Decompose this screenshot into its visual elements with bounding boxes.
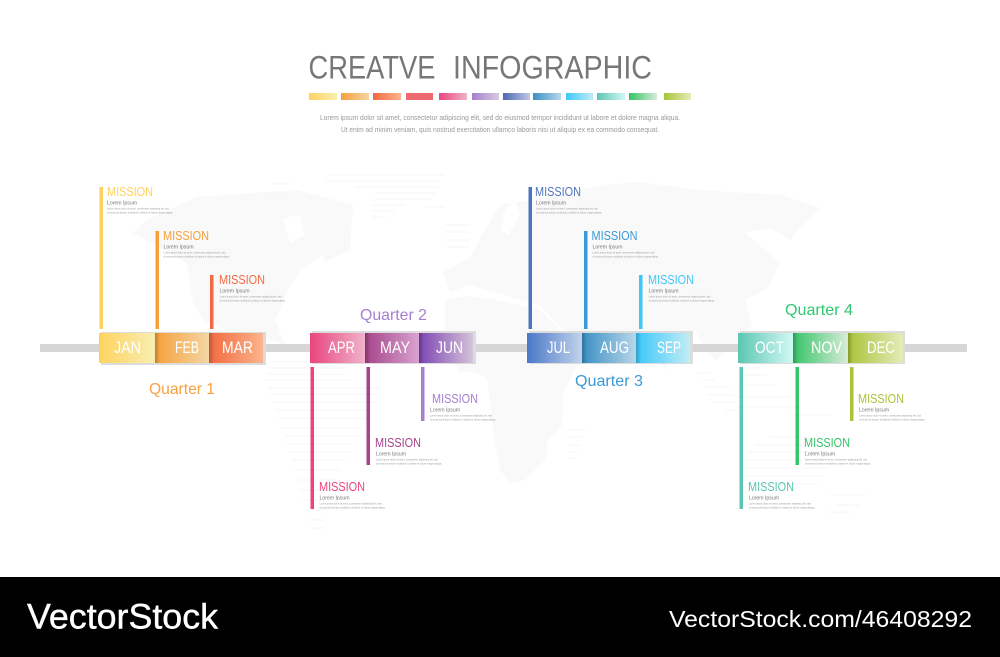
month blocks: apr may jun: APR [328,339,355,357]
mission: august: do eiusmod tempor incididunt ut labore et dolore magna aliqua. [592,254,659,258]
mission: december: Lorem Ipsum [859,408,889,414]
month blocks: jul aug sep [527,331,693,364]
mission: august: Lorem ipsum dolor sit amet, consectetur adipiscing elit, sed [592,250,655,254]
mission: november: do eiusmod tempor incididunt ut labore et dolore magna aliqua. [805,462,871,466]
mission: september: Lorem Ipsum [648,288,679,294]
mission: june: MISSION [432,391,478,406]
month blocks: apr may jun [310,331,476,364]
month blocks: oct nov dec: NOV [811,339,842,357]
panel: quarter 1 [99,184,286,398]
footer logo: VectorStock [27,598,219,636]
month blocks: jan feb mar: FEB [175,339,199,357]
mission: march: MISSION [219,272,265,287]
mission: september [639,272,715,329]
timeline band [40,344,967,352]
mission: august [584,228,659,329]
mission: february [156,228,230,329]
mission: february: MISSION [163,228,209,243]
mission: march: Lorem ipsum dolor sit amet, consectetur adipiscing elit, sed [220,294,282,298]
month blocks: jul aug sep: JUL [547,339,570,357]
mission: march: do eiusmod tempor incididunt ut labore et dolore magna aliqua. [220,298,286,302]
mission: february: Lorem ipsum dolor sit amet, consectetur adipiscing elit, sed [164,250,226,254]
panel: quarter 2 [310,307,496,510]
month blocks: oct nov dec: DEC [867,339,895,357]
month blocks: jan feb mar: JAN [114,339,141,357]
mission: july: Lorem ipsum dolor sit amet, consectetur adipiscing elit, sed [536,206,598,210]
intro text: Ut enim ad minim veniam, quis nostrud exercitation ullamco laboris nisi ut aliquip ex ea commodo consequat. [341,125,659,134]
mission: march [210,272,286,329]
mission: january: Lorem ipsum dolor sit amet, consectetur adipiscing elit, sed [107,206,169,210]
mission: january: Lorem Ipsum [107,200,137,206]
title: INFOGRAPHIC [453,50,652,86]
mission: january: MISSION [107,184,153,199]
quarter 4 label: Quarter 4 [785,302,853,319]
intro text: Lorem ipsum dolor sit amet, consectetur adipiscing elit, sed do eiusmod tempor incididunt ut labore et dolore magna aliqua. [320,113,680,122]
mission: january [100,184,173,329]
mission: april: MISSION [319,479,365,494]
mission: march: Lorem Ipsum [220,288,250,294]
colour strip row [309,93,691,100]
mission: july [528,184,602,329]
title [308,50,652,86]
mission: may: Lorem ipsum dolor sit amet, consectetur adipiscing elit, sed [376,458,438,462]
mission: november [796,367,871,466]
mission: november: Lorem ipsum dolor sit amet, consectetur adipiscing elit, sed [805,458,867,462]
mission: october: Lorem ipsum dolor sit amet, consectetur adipiscing elit, sed [749,502,811,506]
month blocks: jul aug sep: AUG [600,339,629,357]
footer bar [0,577,1000,657]
mission: may: MISSION [375,435,421,450]
intro text [320,113,680,134]
mission: june: Lorem Ipsum [430,408,460,414]
mission: september: do eiusmod tempor incididunt ut labore et dolore magna aliqua. [648,298,715,302]
mission: december: MISSION [858,391,904,406]
month blocks: jul aug sep: SEP [657,339,681,357]
month blocks: apr may jun: MAY [380,339,410,357]
quarter 2 label: Quarter 2 [360,307,427,324]
month blocks: jan feb mar: MAR [222,339,253,357]
mission: october: do eiusmod tempor incididunt ut labore et dolore magna aliqua. [749,506,815,510]
mission: december: do eiusmod tempor incididunt ut labore et dolore magna aliqua. [859,418,925,422]
panel: quarter 3 [527,184,715,390]
mission: september: MISSION [648,272,694,287]
mission: april: do eiusmod tempor incididunt ut labore et dolore magna aliqua. [320,506,386,510]
mission: august: MISSION [592,228,638,243]
mission: may: Lorem Ipsum [376,452,406,458]
mission: may: do eiusmod tempor incididunt ut labore et dolore magna aliqua. [376,462,442,466]
mission: october: MISSION [748,479,794,494]
mission: may [366,367,442,466]
quarter 3 label: Quarter 3 [575,373,643,390]
month blocks: oct nov dec [738,331,905,364]
month blocks: apr may jun: JUN [436,339,463,357]
month blocks: oct nov dec: OCT [755,339,784,357]
mission: february: Lorem Ipsum [164,244,194,250]
world map background [133,175,865,528]
title: CREATVE [308,50,436,86]
mission: august: Lorem Ipsum [592,244,623,250]
quarter 1 label: Quarter 1 [149,381,215,398]
mission: december [850,367,925,422]
mission: january: do eiusmod tempor incididunt ut labore et dolore magna aliqua. [107,210,173,214]
mission: july: do eiusmod tempor incididunt ut labore et dolore magna aliqua. [536,210,602,214]
mission: october [740,367,815,510]
mission: april [310,367,386,510]
mission: july: Lorem Ipsum [536,200,566,206]
mission: february: do eiusmod tempor incididunt ut labore et dolore magna aliqua. [164,254,230,258]
mission: november: Lorem Ipsum [805,452,835,458]
mission: october: Lorem Ipsum [749,496,779,502]
panel: quarter 4 [738,302,925,510]
mission: april: Lorem ipsum dolor sit amet, consectetur adipiscing elit, sed [320,502,382,506]
mission: december: Lorem ipsum dolor sit amet, consectetur adipiscing elit, sed [859,414,921,418]
month blocks: jan feb mar [99,332,266,365]
mission: june: do eiusmod tempor incididunt ut labore et dolore magna aliqua. [430,418,496,422]
mission: june: Lorem ipsum dolor sit amet, consectetur adipiscing elit, sed [430,414,492,418]
mission: july: MISSION [535,184,581,199]
footer image id: VectorStock.com/46408292 [669,606,972,632]
mission: april: Lorem Ipsum [320,496,350,502]
mission: june [421,367,496,422]
mission: november: MISSION [804,435,850,450]
mission: september: Lorem ipsum dolor sit amet, consectetur adipiscing elit, sed [648,294,711,298]
